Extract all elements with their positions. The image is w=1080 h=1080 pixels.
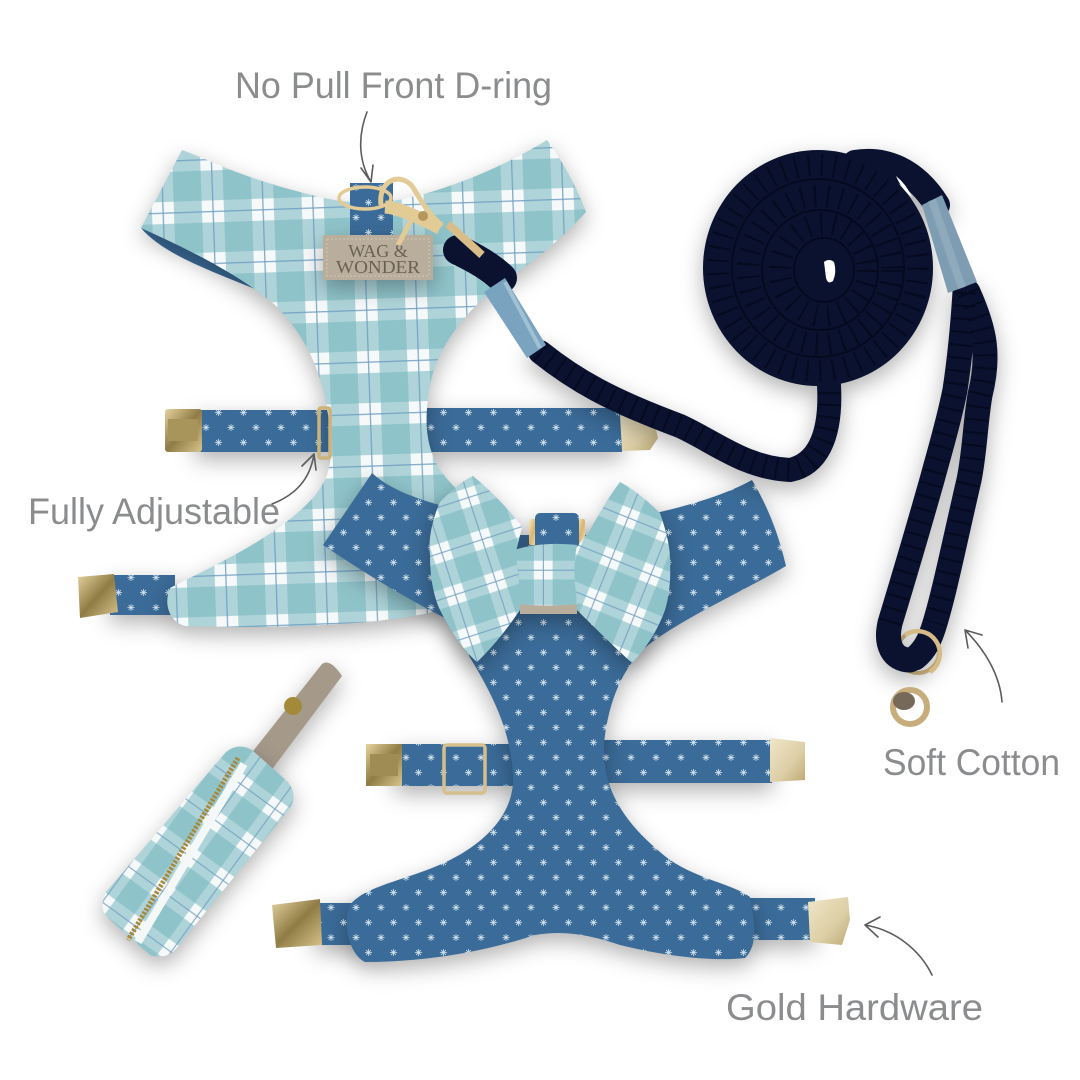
slider xyxy=(319,408,330,458)
bag: waste bag holder xyxy=(102,662,342,957)
coil xyxy=(703,150,933,386)
harness body stars xyxy=(323,473,786,962)
harness underside lining xyxy=(141,228,262,292)
leash: navy rope xyxy=(339,150,985,724)
zipper teeth xyxy=(128,758,238,940)
ring strap xyxy=(350,183,393,236)
label: fully adjustable xyxy=(28,454,316,532)
label: no pull front d-ring: No Pull Front D-ring xyxy=(235,65,552,106)
zipper xyxy=(138,764,244,942)
coil hole xyxy=(824,260,835,282)
bow xyxy=(429,476,670,663)
arrow to d-ring xyxy=(361,112,373,182)
arrow to slider xyxy=(272,454,316,504)
snap xyxy=(284,697,302,715)
leather tab xyxy=(246,662,342,772)
label: fully adjustable: Fully Adjustable xyxy=(28,491,280,532)
arrow to buckle xyxy=(865,917,932,975)
label: gold hardware xyxy=(726,917,983,1028)
ring front arc xyxy=(905,631,940,672)
leather label xyxy=(323,235,433,280)
blue wrap upper xyxy=(922,195,977,293)
label: gold hardware: Gold Hardware xyxy=(726,987,983,1028)
slider lower xyxy=(444,745,485,793)
harness body plaid xyxy=(141,140,586,627)
coil gap xyxy=(896,176,912,197)
rope end near snap xyxy=(458,250,502,278)
tan tag under knot xyxy=(520,600,577,614)
bow knot xyxy=(514,544,578,606)
end ring xyxy=(897,631,939,673)
buckles lower xyxy=(272,738,850,948)
gold clip xyxy=(339,179,482,255)
bow top loop xyxy=(529,513,585,553)
straps lower xyxy=(315,740,815,945)
label: soft cotton xyxy=(883,630,1060,783)
label: no pull front d-ring xyxy=(235,65,552,182)
clip rivet xyxy=(418,211,428,221)
label: soft cotton: Soft Cotton xyxy=(883,742,1060,783)
leather label: WONDER xyxy=(336,257,420,277)
buckles upper xyxy=(78,409,658,618)
bag body xyxy=(102,746,294,957)
strap: upper chest strap xyxy=(110,408,622,615)
harness: plaid top harness xyxy=(78,140,658,627)
leather label: WAG & xyxy=(348,241,408,261)
rope twist xyxy=(540,165,985,623)
arrow to rope xyxy=(965,630,1002,702)
rope segments xyxy=(540,150,985,660)
harness: star top harness with bow xyxy=(272,473,850,962)
blue wrap lower xyxy=(484,278,546,358)
charm xyxy=(893,690,927,724)
